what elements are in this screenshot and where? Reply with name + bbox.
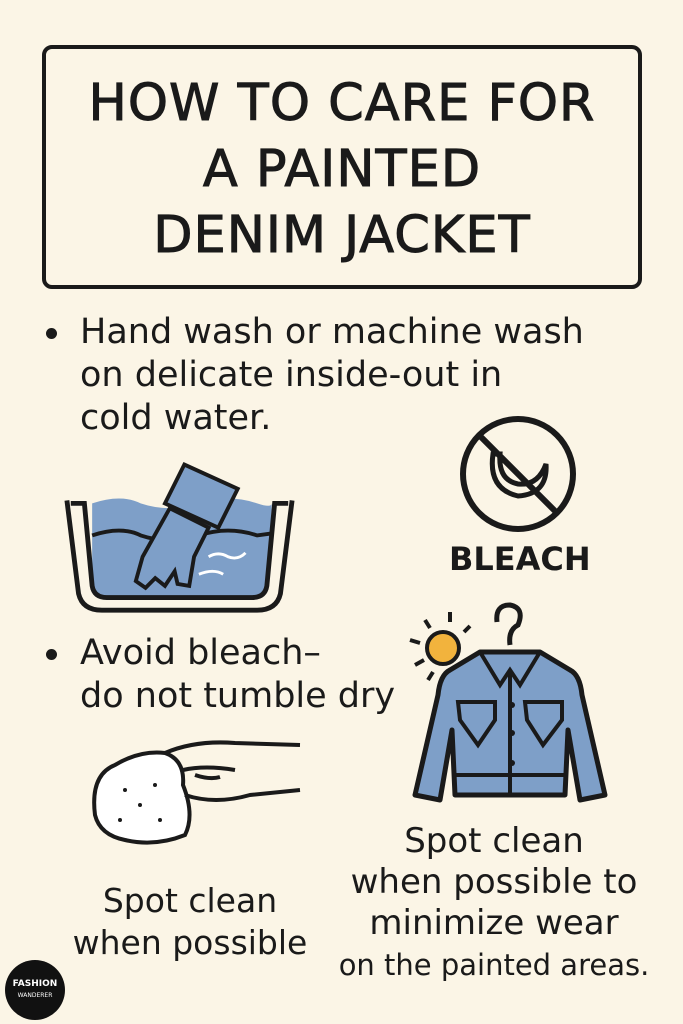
logo: WANDERER	[18, 992, 52, 999]
title box	[42, 45, 642, 289]
icon: no bleach	[460, 416, 576, 532]
bullet text 2: Avoid bleach–	[80, 633, 321, 673]
title text	[89, 74, 595, 265]
bullet text 1: Hand wash or machine wash	[80, 312, 584, 352]
bullet text 2: do not tumble dry	[80, 676, 395, 716]
bullet text 2	[46, 633, 395, 716]
bullet text 1	[46, 312, 584, 438]
caption left: when possible	[73, 923, 307, 962]
icon: hand with cloth	[92, 740, 300, 845]
caption left: Spot clean	[103, 881, 277, 920]
title text: DENIM JACKET	[153, 206, 531, 265]
caption right: Spot clean	[404, 821, 584, 861]
title text: HOW TO CARE FOR	[89, 74, 595, 133]
logo	[5, 960, 65, 1020]
caption left	[73, 881, 307, 962]
caption right: minimize wear	[369, 903, 619, 943]
logo: FASHION	[13, 979, 57, 989]
caption right: on the painted areas.	[339, 948, 649, 982]
caption right	[339, 821, 649, 982]
icon: basin with hand	[64, 462, 294, 613]
bullet text 1: cold water.	[80, 398, 271, 438]
caption right: when possible to	[351, 862, 637, 902]
title text: A PAINTED	[203, 140, 481, 199]
icon: jacket on hanger with sun	[409, 602, 608, 802]
bullet text 1: on delicate inside-out in	[80, 355, 502, 395]
label: BLEACH: BLEACH	[449, 540, 591, 578]
